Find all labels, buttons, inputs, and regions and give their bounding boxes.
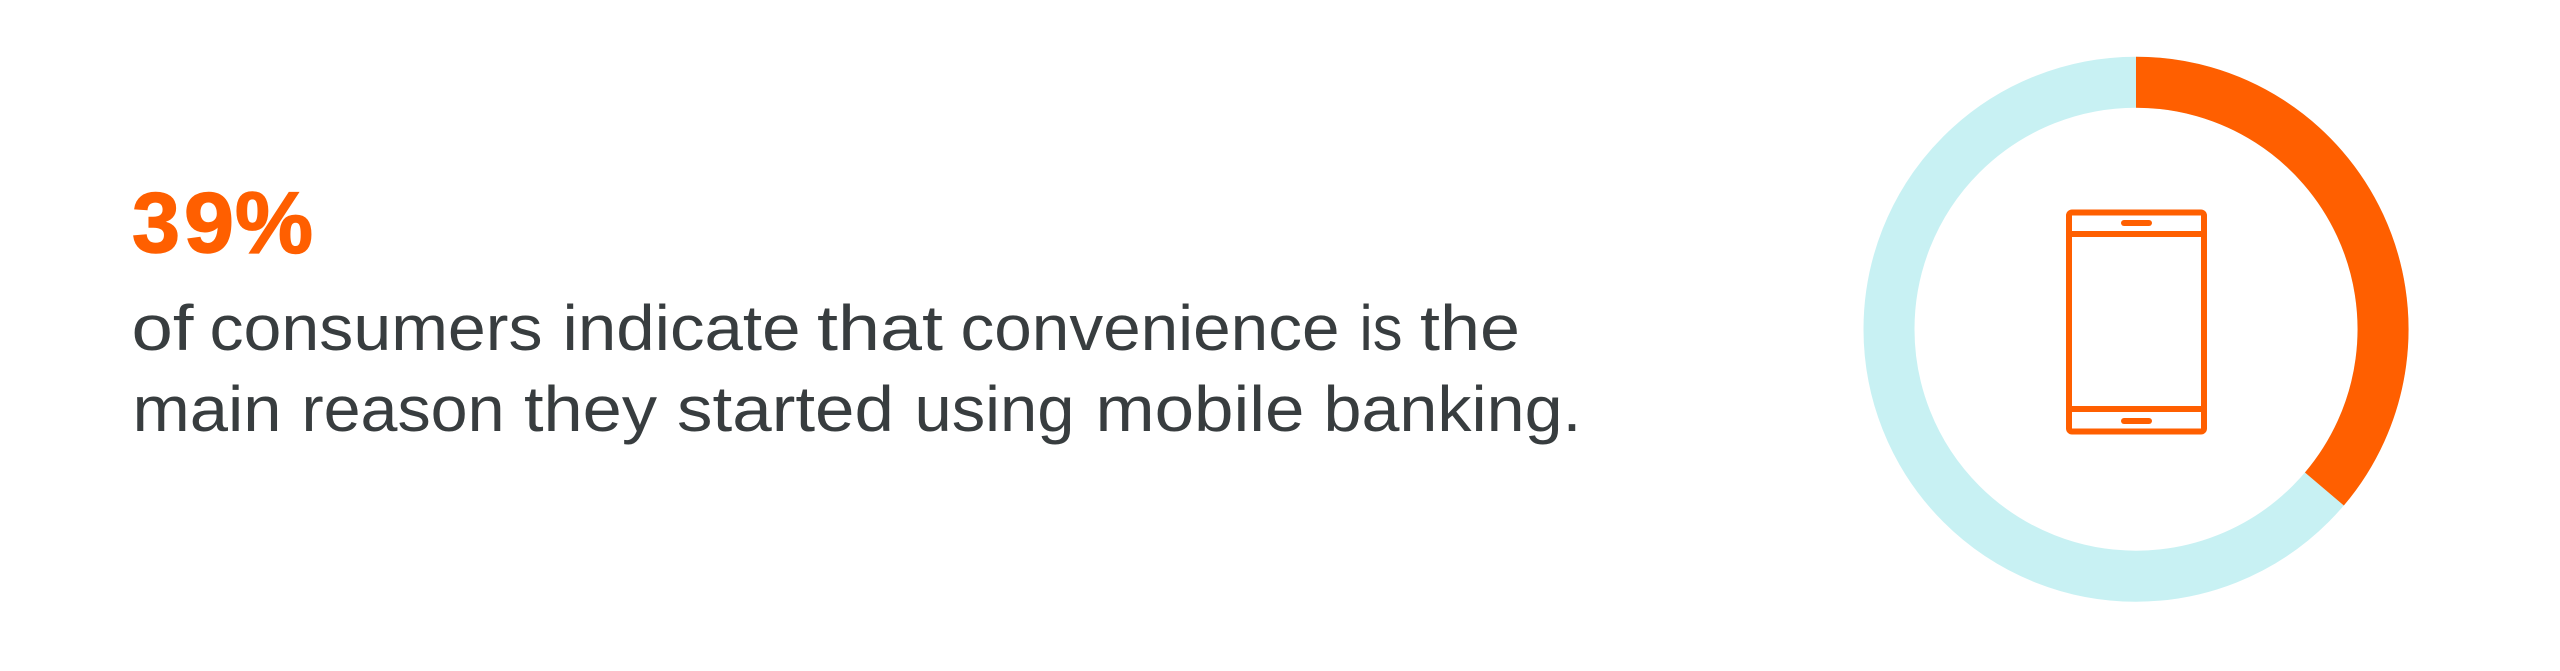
top speaker [2124, 220, 2149, 226]
description line 2 [132, 373, 1582, 445]
description line 1: of [132, 292, 194, 364]
description line 2: using [914, 373, 1074, 445]
statistic: 39% [132, 175, 313, 272]
description line 1 [132, 292, 1520, 364]
bottom bezel line [2069, 406, 2204, 412]
phone body [2069, 212, 2204, 432]
description line 2: they [524, 373, 657, 445]
description line 1: consumers [210, 292, 542, 364]
statistic: 39%: % [235, 175, 313, 272]
description line 1: convenience [960, 292, 1340, 364]
description line 2: mobile [1096, 373, 1304, 445]
description line 2: main [132, 373, 282, 445]
description line 1: is [1360, 292, 1402, 364]
statistic: 39%: 9 [184, 176, 234, 271]
description line 2: started [677, 373, 894, 445]
description line 1: the [1420, 292, 1520, 364]
icon: smartphone [2069, 212, 2204, 432]
description line 1: that [817, 292, 943, 364]
statistic: 39%: 3 [132, 176, 180, 271]
top bezel line [2069, 231, 2204, 237]
bottom button [2124, 418, 2149, 424]
donut track [1889, 82, 2383, 576]
donut chart [1889, 82, 2383, 576]
description line 2: reason [302, 373, 504, 445]
description text [132, 292, 1582, 445]
description line 1: indicate [562, 292, 800, 364]
donut highlighted segment [2136, 82, 2383, 489]
description line 2: banking. [1324, 373, 1582, 445]
